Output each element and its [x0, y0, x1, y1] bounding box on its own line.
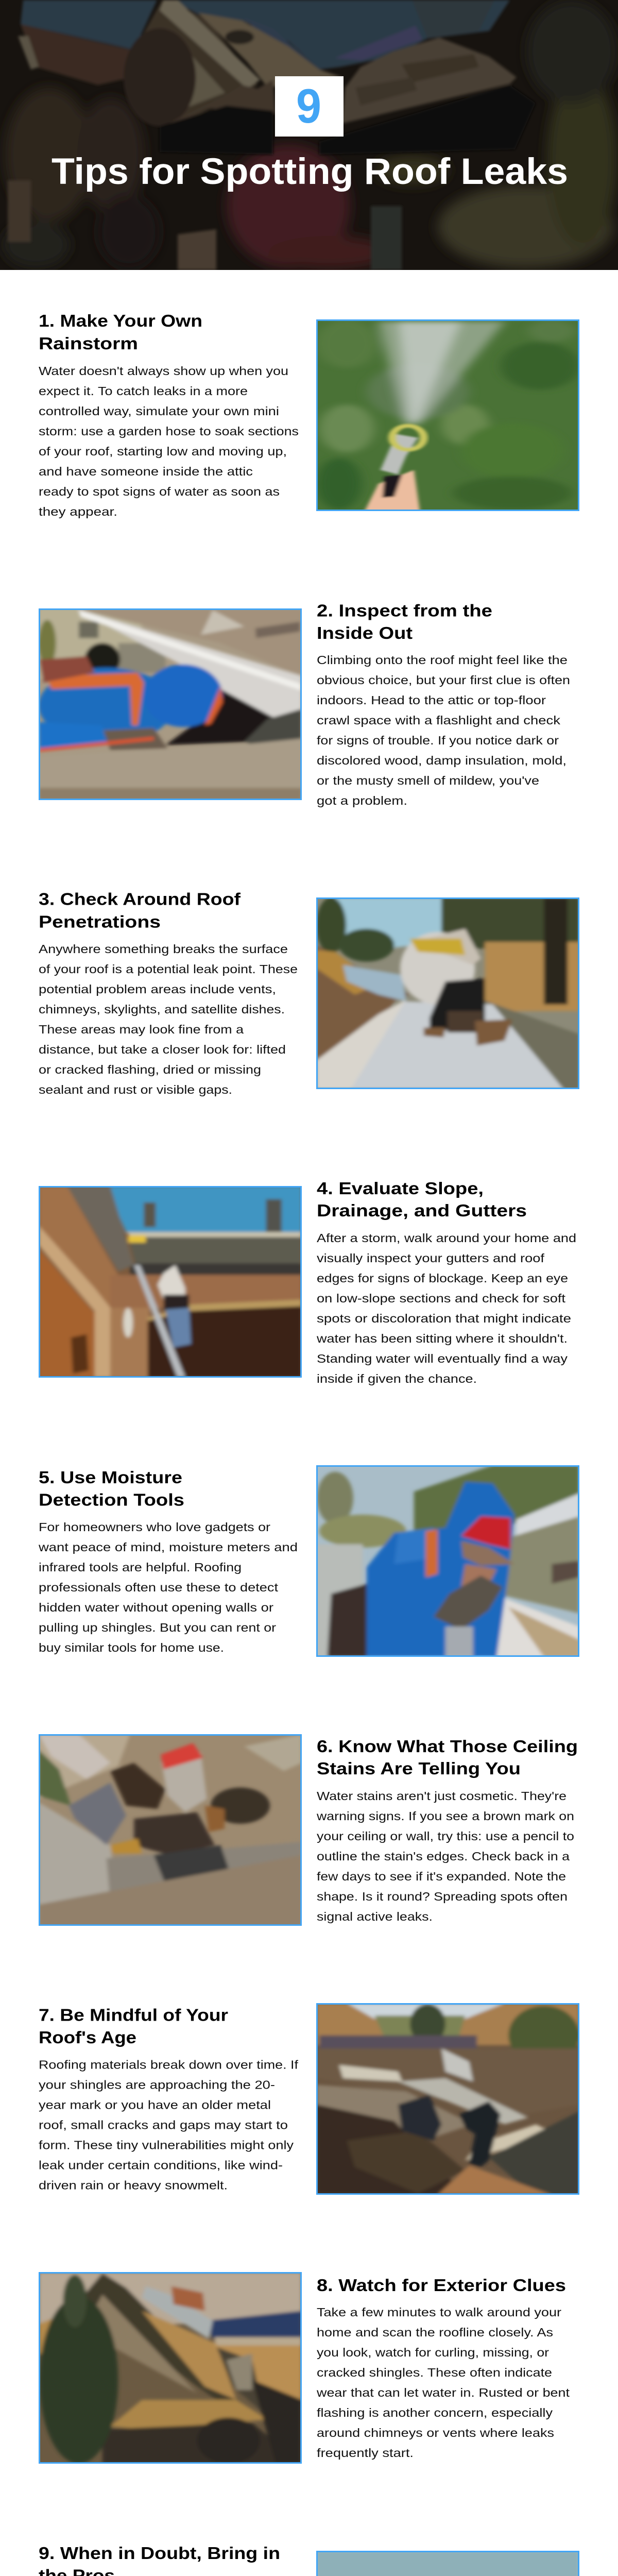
body text: your ceiling or wall, try this: use a pencil to [317, 1829, 574, 1843]
heading: Rainstorm [39, 334, 138, 353]
body text: flashing is another concern, especially [317, 2406, 553, 2419]
body text: water has been sitting where it shouldn't. [316, 1332, 568, 1345]
photo: garden hose spraying water [316, 319, 579, 511]
body text: of your roof, starting low and moving up, [39, 445, 287, 458]
tip 9: when in doubt, bring in the pros [39, 2544, 579, 2576]
number badge: 9 [296, 79, 321, 133]
tip 4: evaluate slope, drainage, and gutters [39, 1179, 576, 1385]
body text: warning signs. If you see a brown mark on [316, 1809, 574, 1823]
heading: Drainage, and Gutters [317, 1201, 527, 1220]
body text: roof, small cracks and gaps may start to [39, 2119, 288, 2132]
body text: For homeowners who love gadgets or [39, 1520, 270, 1534]
body text [38, 1520, 298, 1654]
body text: discolored wood, damp insulation, mold, [317, 754, 566, 767]
body text: indoors. Head to the attic or top-floor [317, 693, 546, 707]
heading: 3. Check Around Roof [39, 889, 241, 909]
heading [317, 601, 492, 642]
body text: visually inspect your gutters and roof [317, 1251, 545, 1265]
heading: Stains Are Telling You [317, 1759, 521, 1778]
body text [39, 942, 298, 1096]
photo: company truck and trailer [316, 2551, 579, 2576]
heading [39, 2544, 280, 2576]
body text: buy similar tools for home use. [39, 1641, 224, 1654]
body text: or cracked flashing, dried or missing [39, 1063, 261, 1076]
tip 1: make your own rainstorm [39, 311, 579, 518]
body text [39, 2058, 299, 2192]
heading: 7. Be Mindful of Your [39, 2005, 228, 2025]
photo: roofer reaching under eave [39, 608, 302, 800]
body text: sealant and rust or visible gaps. [39, 1083, 232, 1096]
body text [317, 653, 570, 807]
body text: signal active leaks. [317, 1910, 433, 1923]
body text: storm: use a garden hose to soak sections [39, 425, 299, 438]
body text: Anywhere something breaks the surface [39, 942, 288, 956]
tip 3: check around roof penetrations [39, 889, 579, 1096]
heading: Penetrations [39, 912, 161, 931]
body text: hidden water without opening walls or [39, 1601, 273, 1614]
photo: gable and exposed decking [39, 2272, 302, 2464]
heading: Detection Tools [39, 1490, 184, 1510]
body text: cracked shingles. These often indicate [317, 2366, 552, 2379]
body text: year mark or you have an older metal [39, 2098, 271, 2111]
body text: on low-slope sections and check for soft [317, 1292, 566, 1305]
title: Tips for Spotting Roof Leaks [52, 151, 568, 192]
body text: spots or discoloration that might indicate [317, 1312, 571, 1325]
body text: Standing water will eventually find a way [317, 1352, 568, 1365]
body text: frequently start. [317, 2446, 414, 2460]
hero photo: damaged roof at dusk [0, 0, 618, 270]
body text: home and scan the roofline closely. As [317, 2326, 553, 2339]
heading: Inside Out [317, 623, 413, 642]
body text [316, 1231, 576, 1385]
body text: form. These tiny vulnerabilities might only [39, 2138, 294, 2151]
heading [39, 889, 241, 931]
body text: few days to see if it's expanded. Note the [317, 1870, 566, 1883]
body text: around chimneys or vents where leaks [317, 2426, 554, 2439]
body text: Climbing onto the roof might feel like the [317, 653, 568, 667]
body text: potential problem areas include vents, [39, 982, 276, 996]
heading [317, 1737, 578, 1778]
body text: want peace of mind, moisture meters and [38, 1540, 298, 1554]
body text: controlled way, simulate your own mini [39, 404, 279, 418]
body text: infrared tools are helpful. Roofing [39, 1561, 242, 1574]
body text: of your roof is a potential leak point. These [39, 962, 298, 976]
body text: Roofing materials break down over time. If [39, 2058, 299, 2071]
heading: Roof's Age [39, 2028, 136, 2047]
heading: 6. Know What Those Ceiling [317, 1737, 578, 1756]
photo: roofer kneeling on underlayment [316, 897, 579, 1089]
heading [39, 1468, 184, 1510]
body text: inside if given the chance. [317, 1372, 477, 1385]
body text: Take a few minutes to walk around your [317, 2306, 561, 2319]
photo: workers stripping an old roof [316, 2003, 579, 2195]
body text [39, 364, 299, 518]
tip 6: know what those ceiling stains are telling you [39, 1734, 578, 1926]
body text [316, 1789, 574, 1923]
heading: 9. When in Doubt, Bring in [39, 2544, 280, 2563]
heading [39, 2005, 228, 2047]
number badge [275, 76, 344, 137]
body text: outline the stain's edges. Check back in a [317, 1850, 570, 1863]
tip 7: be mindful of your roof's age [39, 2003, 579, 2195]
body text: leak under certain conditions, like wind- [39, 2159, 283, 2172]
heading [317, 1179, 527, 1220]
heading: 4. Evaluate Slope, [317, 1179, 484, 1198]
body text: or the musty smell of mildew, you've [317, 774, 539, 787]
body text: pulling up shingles. But you can rent or [39, 1621, 276, 1634]
body text [316, 2306, 570, 2460]
body text: edges for signs of blockage. Keep an eye [317, 1272, 568, 1285]
body text: expect it. To catch leaks in a more [39, 384, 248, 398]
tip 8: watch for exterior clues [39, 2272, 570, 2464]
body text: shape. Is it round? Spreading spots often [317, 1890, 568, 1903]
body text: ready to spot signs of water as soon as [39, 485, 280, 498]
body text: distance, but take a closer look for: lifted [39, 1043, 286, 1056]
body text: After a storm, walk around your home and [317, 1231, 576, 1245]
body text: you look, watch for curling, missing, or [317, 2346, 549, 2359]
body text: got a problem. [317, 794, 407, 807]
photo: nail gun on shingles [39, 1734, 302, 1926]
body text: Water stains aren't just cosmetic. They're [317, 1789, 566, 1803]
body text: they appear. [39, 505, 117, 518]
body text: crawl space with a flashlight and check [317, 714, 561, 727]
heading: 8. Watch for Exterior Clues [317, 2276, 566, 2295]
body text: wear that can let water in. Rusted or bent [316, 2386, 570, 2399]
heading: 1. Make Your Own [39, 311, 202, 330]
photo: roofer on ladder at garage [39, 1186, 302, 1378]
body text: your shingles are approaching the 20- [39, 2078, 275, 2092]
body text: and have someone inside the attic [39, 465, 253, 478]
heading: 5. Use Moisture [39, 1468, 182, 1487]
tip 5: use moisture detection tools [38, 1465, 579, 1657]
body text: for signs of trouble. If you notice dark or [317, 734, 559, 747]
body text: driven rain or heavy snowmelt. [39, 2178, 228, 2192]
heading [39, 311, 202, 353]
photo: roofer in blue hood with red cap [316, 1465, 579, 1657]
tip 2: inspect from the inside out [39, 601, 570, 807]
body text: These areas may look fine from a [39, 1023, 244, 1036]
body text: professionals often use these to detect [39, 1581, 279, 1594]
heading: 2. Inspect from the [317, 601, 492, 620]
hero header [0, 0, 618, 270]
body text: Water doesn't always show up when you [39, 364, 288, 378]
body text: chimneys, skylights, and satellite dishes. [39, 1003, 285, 1016]
body text: obvious choice, but your first clue is often [317, 673, 570, 687]
